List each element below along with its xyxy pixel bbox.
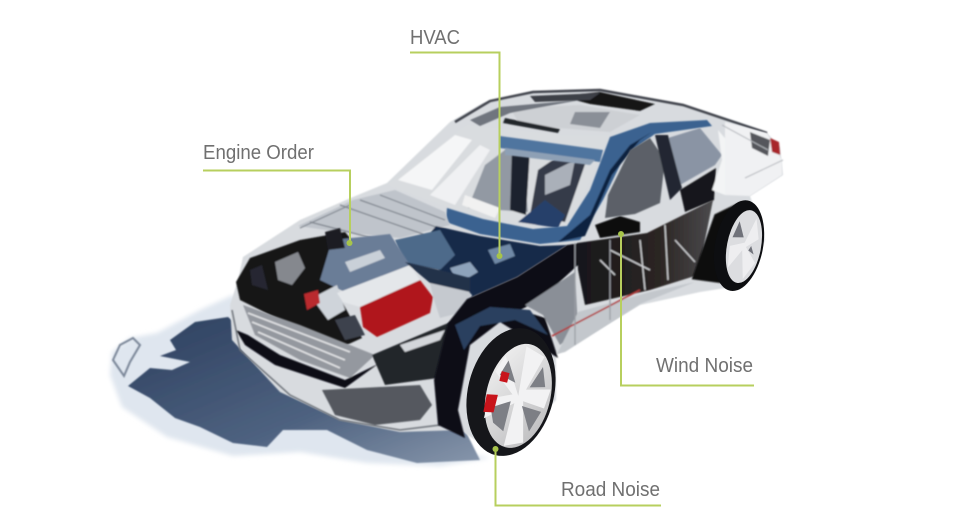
brake caliper: [482, 369, 510, 416]
callout: Engine Order: Engine Order: [203, 142, 314, 164]
hood and cowl mechanicals: [298, 190, 567, 299]
engine bay: [236, 228, 472, 348]
front fender and door dark panels: [434, 200, 713, 438]
callout: Wind Noise: Wind Noise: [656, 355, 753, 377]
taillight and trunk: [725, 122, 782, 196]
callout: Road Noise: Road Noise: [561, 479, 660, 501]
roof frame and sunroof: [455, 90, 767, 133]
car shadow on the ground: [110, 295, 490, 466]
icon: engine cover silver: [337, 265, 420, 307]
callout: HVAC: HVAC: [410, 27, 460, 49]
car body glass shell: [230, 90, 783, 456]
callout: Wind Noise: [618, 231, 754, 386]
icon: engine cover red: [360, 280, 433, 337]
callout: Road Noise: [492, 446, 661, 506]
windshield and interior: [387, 125, 610, 228]
front grille and bumper: [232, 305, 460, 430]
seats: [468, 150, 528, 212]
front wheel: [454, 319, 568, 465]
battery box: [430, 276, 472, 318]
rear wheel: [691, 193, 771, 295]
callout: Engine Order: [203, 142, 352, 246]
callout: HVAC: [410, 27, 502, 259]
blue roof strip, A pillar and cowl: [446, 120, 712, 244]
mirror: [595, 216, 640, 238]
side windows: [605, 122, 783, 218]
